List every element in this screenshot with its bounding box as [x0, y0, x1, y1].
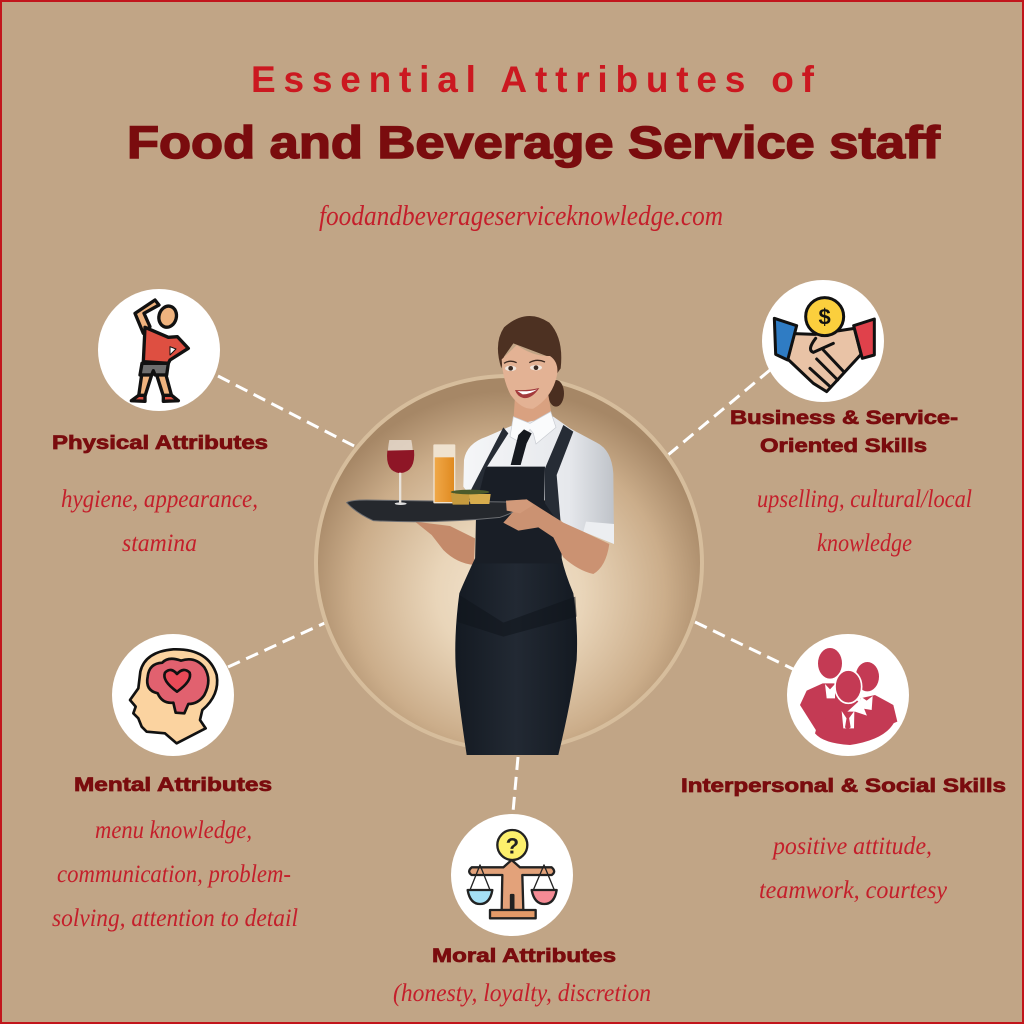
panel: business and service-oriented skills: [730, 280, 972, 557]
panel: mental attributes: [52, 634, 298, 932]
heading: Oriented Skills: [760, 436, 927, 457]
garnish: [451, 490, 489, 494]
cup left: [451, 493, 470, 505]
description: knowledge: [817, 530, 912, 557]
dashed connectors: [218, 370, 795, 812]
right iris: [534, 365, 538, 370]
collar: [510, 412, 556, 444]
cup right: [469, 494, 491, 504]
website url: foodandbeverageserviceknowledge.com: [319, 201, 723, 232]
icon: balance scale person: [451, 814, 573, 936]
description: (honesty, loyalty, discretion: [393, 980, 651, 1007]
hair back: [498, 316, 561, 375]
title line 2: Food and Beverage Service staff: [127, 117, 941, 168]
apron bib: [468, 467, 562, 563]
eyes: [504, 360, 545, 371]
icon: stretching person: [98, 289, 220, 411]
smile: [515, 388, 539, 398]
glass: [433, 444, 455, 503]
description: menu knowledge,: [95, 817, 252, 844]
left iris: [508, 366, 513, 371]
description: communication, problem-: [57, 861, 291, 888]
description: [757, 486, 972, 557]
description: positive attitude,: [771, 833, 932, 860]
right person: [856, 662, 879, 691]
heading: Mental Attributes: [74, 775, 272, 796]
face: [502, 345, 557, 409]
juice: [435, 457, 454, 502]
foot: [395, 502, 407, 505]
apron skirt: [455, 558, 577, 755]
panel: physical attributes: [52, 289, 268, 557]
description: [52, 817, 298, 932]
description: solving, attention to detail: [52, 905, 298, 932]
panel: interpersonal and social skills: [681, 634, 1006, 904]
icon: handshake with dollar coin: $: [819, 305, 831, 330]
heading: Business & Service-: [730, 408, 958, 429]
wine: [387, 450, 414, 473]
waitress illustration: [347, 316, 614, 755]
icon: balance scale person: ?: [506, 833, 519, 858]
description: hygiene, appearance,: [61, 486, 258, 513]
central circular backdrop: [316, 376, 702, 750]
neck: [513, 395, 552, 432]
stem: [399, 473, 401, 503]
icon: head with brain and heart: [112, 634, 234, 756]
hair bun: [548, 380, 564, 407]
tray: [347, 500, 518, 522]
teeth: [517, 389, 537, 394]
title line 1: Essential Attributes of: [251, 59, 815, 100]
apron straps: [468, 425, 573, 527]
wine bowl: [388, 440, 413, 473]
heading: Moral Attributes: [432, 946, 616, 967]
apron pocket fold: [457, 595, 577, 637]
icon: group of people: [787, 634, 909, 756]
eyebrows: [504, 360, 545, 363]
description: [61, 486, 258, 557]
near forearm and hand: [503, 499, 609, 574]
description: stamina: [122, 530, 197, 557]
description: [759, 833, 948, 904]
panel: moral attributes: [393, 814, 651, 1007]
juice glass: [433, 444, 455, 503]
description: teamwork, courtesy: [759, 877, 948, 904]
tie: [511, 429, 532, 465]
fingers over tray: [506, 499, 533, 513]
left eye white: [505, 366, 516, 371]
left person: [818, 648, 842, 679]
far forearm: [415, 522, 475, 565]
shirt: [463, 417, 614, 544]
heading: Physical Attributes: [52, 433, 268, 454]
icon: handshake with dollar coin: [762, 280, 884, 402]
heading: Interpersonal & Social Skills: [681, 776, 1006, 797]
right eye white: [530, 365, 542, 370]
wine glass: [387, 440, 414, 505]
center person: [835, 670, 862, 703]
description: upselling, cultural/local: [757, 486, 972, 513]
gold cups: [451, 490, 491, 505]
heading: [730, 408, 958, 457]
sleeve cuff: [583, 522, 614, 544]
